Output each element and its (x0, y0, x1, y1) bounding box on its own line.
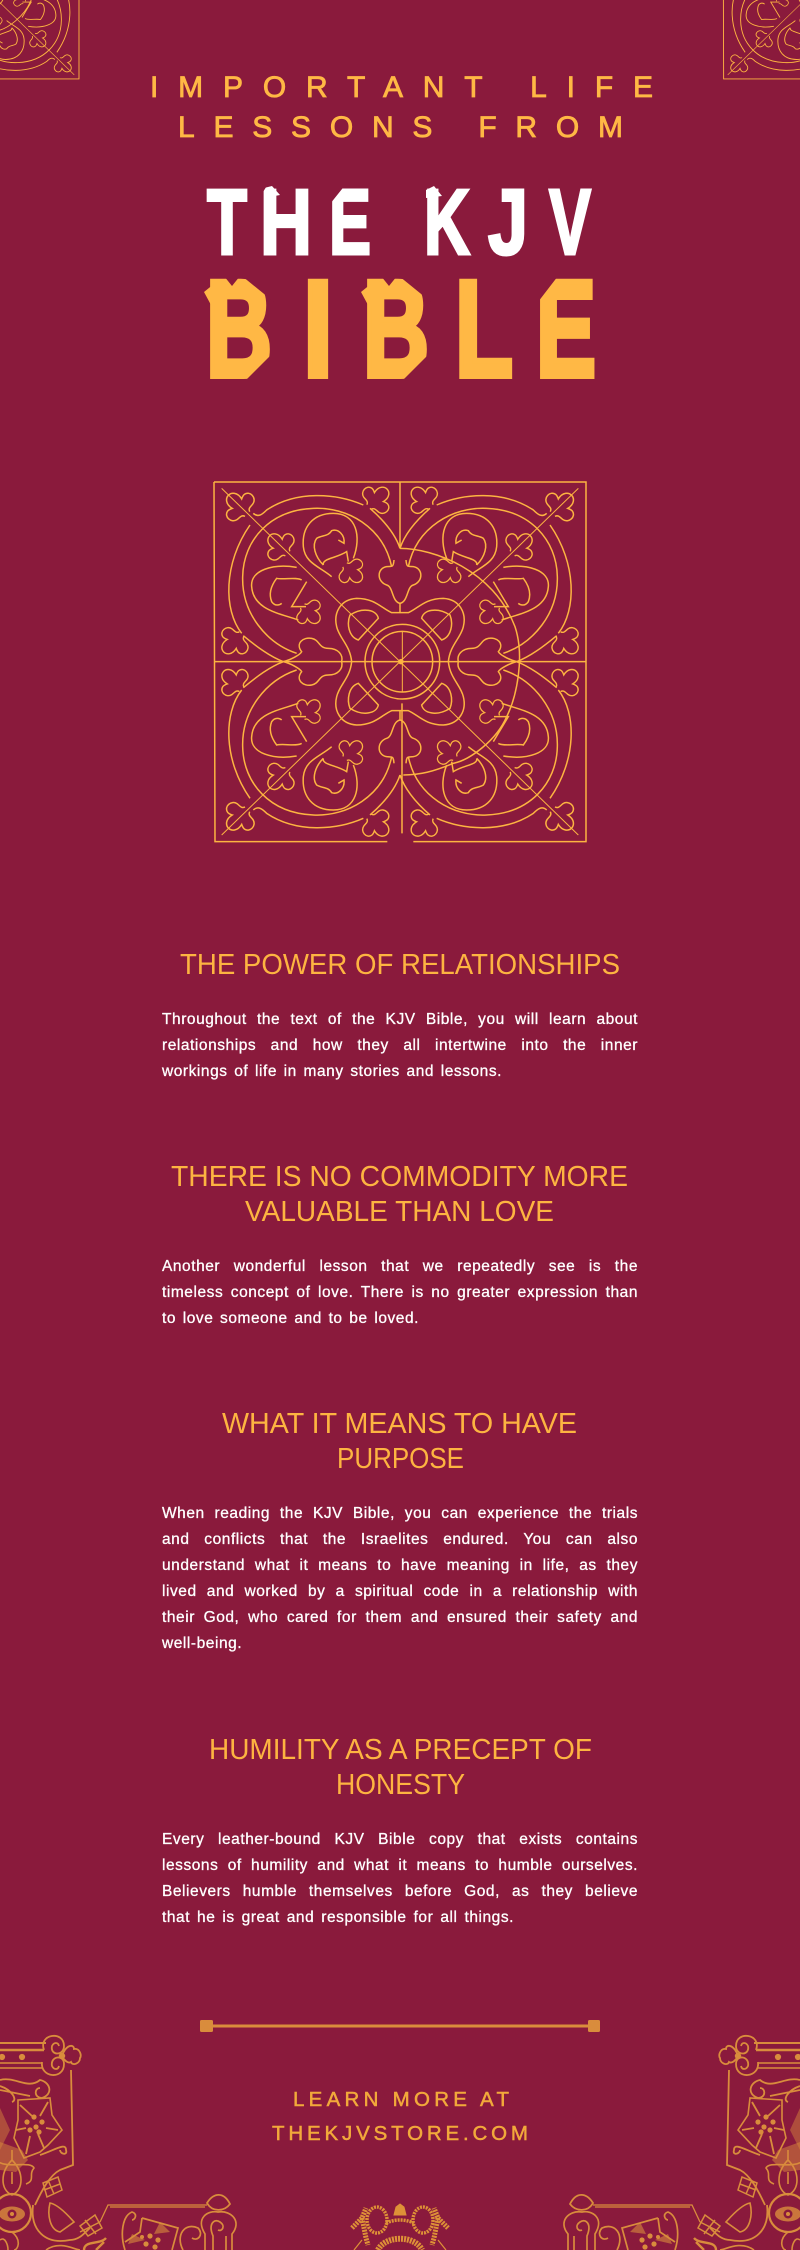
body text: relationships: Throughout the text of the KJV Bible, you will learn about (162, 1011, 638, 1028)
heading: humility as a precept of honesty: HUMILITY AS A PRECEPT OF (209, 1734, 592, 1766)
subtitle (150, 71, 653, 144)
body text: love (162, 1258, 638, 1327)
heading: no commodity more valuable than love: THERE IS NO COMMODITY MORE (171, 1161, 628, 1193)
call to action: THEKJVSTORE.COM (272, 2122, 528, 2145)
title: THE KJV (207, 170, 591, 274)
ornament: top right corner (722, 0, 800, 81)
subtitle: IMPORTANT LIFE (150, 71, 653, 104)
heading: no commodity more valuable than love (171, 1161, 628, 1228)
body text: humility: lessons of humility and what it means to humble ourselves. (162, 1857, 638, 1874)
heading: what it means to have purpose: WHAT IT MEANS TO HAVE (222, 1408, 577, 1440)
title: BIBLE: L (455, 253, 513, 406)
body text: purpose: When reading the KJV Bible, you can experience the trials (162, 1505, 638, 1522)
title: BIBLE (204, 253, 596, 406)
heading: the power of relationships: THE POWER OF RELATIONSHIPS (180, 949, 620, 981)
ornament: bottom right border (564, 2036, 800, 2250)
body text: humility (162, 1831, 638, 1926)
ornament: top left corner (0, 0, 80, 81)
body text: relationships: relationships and how they all intertwine into the inner (162, 1037, 638, 1054)
ornament: central gothic tile (212, 478, 588, 846)
body text: humility: Believers humble themselves before God, as they believe (162, 1883, 638, 1900)
body text: humility: that he is great and responsible for all things. (162, 1909, 514, 1926)
title: BIBLE: E (536, 253, 596, 406)
title: BIBLE: B (206, 253, 272, 406)
subtitle: LESSONS FROM (178, 111, 623, 144)
title: THE KJV: H (260, 170, 312, 274)
heading: what it means to have purpose (222, 1408, 577, 1475)
body text: humility: Every leather-bound KJV Bible copy that exists contains (162, 1831, 638, 1848)
call to action (272, 2088, 528, 2145)
heading: what it means to have purpose: PURPOSE (337, 1443, 464, 1475)
heading: humility as a precept of honesty (209, 1734, 592, 1801)
title: THE KJV: E (329, 170, 371, 274)
title: THE KJV: K (424, 170, 470, 274)
title: THE KJV: V (549, 170, 591, 274)
title: BIBLE: I (303, 253, 333, 406)
body text: love: Another wonderful lesson that we repeatedly see is the (162, 1258, 638, 1275)
body text: purpose (162, 1505, 638, 1652)
body text: purpose: their God, who cared for them and ensured their safety and (162, 1609, 638, 1626)
body text: purpose: well-being. (162, 1635, 242, 1652)
ornament: bottom centre crest (352, 2204, 448, 2250)
body text: relationships: workings of life in many stories and lessons. (162, 1063, 502, 1080)
body text: purpose: and conflicts that the Israelites endured. You can also (162, 1531, 638, 1548)
title: BIBLE: B (363, 253, 429, 406)
call to action: LEARN MORE AT (293, 2088, 509, 2111)
title: THE KJV: T (207, 170, 247, 274)
title: THE KJV: J (488, 170, 528, 274)
body text: purpose: understand what it means to have meaning in life, as they (162, 1557, 638, 1574)
body text: love: timeless concept of love. There is no greater expression than (162, 1284, 638, 1301)
ornament: bottom left border (0, 2036, 236, 2250)
divider (200, 2020, 600, 2032)
body text: purpose: lived and worked by a spiritual code in a relationship with (162, 1583, 638, 1600)
body text: love: to love someone and to be loved. (162, 1310, 419, 1327)
heading: humility as a precept of honesty: HONESTY (336, 1769, 465, 1801)
body text: relationships (162, 1011, 638, 1080)
heading: no commodity more valuable than love: VALUABLE THAN LOVE (245, 1196, 554, 1228)
